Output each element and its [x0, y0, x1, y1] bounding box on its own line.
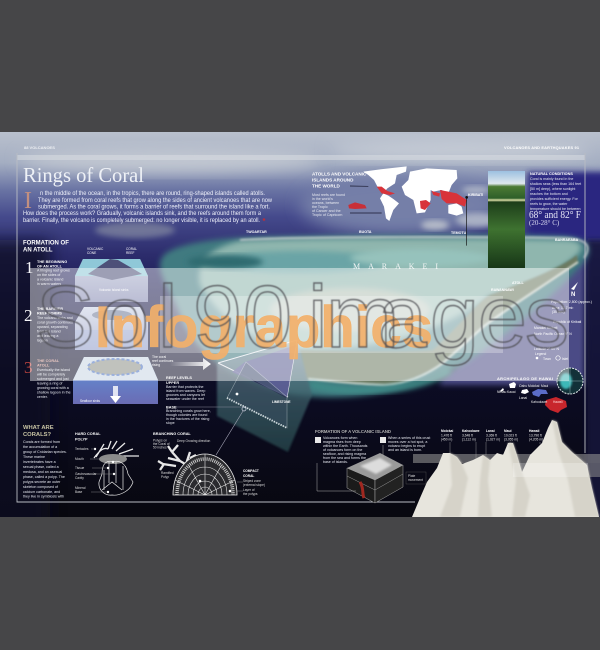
text: world map note	[312, 193, 345, 217]
step text 3: leaving a ring of	[37, 382, 62, 386]
step 1 block: volcano: REEF	[126, 251, 135, 255]
step 1 block: volcano	[75, 247, 148, 302]
panel: what are corals: phase, called a polyp. The	[23, 475, 65, 479]
text: reef levels: BASE	[166, 406, 177, 410]
text: volcanic step one: from the sea and forms the	[323, 456, 366, 460]
map of hawaiian islands: Niihau	[497, 390, 507, 394]
atoll place labels: BUOTA	[359, 230, 372, 234]
natural conditions: shallow seas (less than 164 feet	[530, 182, 581, 186]
intro text block: barrier. Finally, the volcano is completely submerged: no longer visible, it is replaced by an atoll.	[23, 218, 260, 224]
text: reef levels: seawater under the reef	[166, 397, 204, 401]
arrow: reef continues rising: The coral	[152, 355, 166, 359]
watermark: orange word: Infographics	[95, 295, 433, 360]
watermark band	[30, 268, 569, 381]
peak height labels: (1,112 m)	[462, 438, 476, 442]
map of hawaiian islands: Maui	[541, 384, 548, 388]
intro text block: n the middle of the ocean, in the tropics, there are round, ring-shaped islands called atolls.	[40, 191, 265, 197]
heading: atolls and volcanic islands: ISLANDS AROUND	[312, 178, 354, 182]
intro text block	[23, 188, 273, 224]
heading: formation of an atoll: AN ATOLL	[23, 248, 53, 254]
natural conditions: reaches the bottom and	[530, 192, 568, 196]
step text 1: a volcanic island	[37, 278, 63, 282]
diagram: hard coral polyp: Mineral	[75, 486, 86, 490]
map of hawaiian islands: Kahoolawe	[531, 400, 547, 404]
diagram: volcanic island block: Plate	[408, 474, 415, 478]
frame lines	[17, 153, 585, 502]
peak height labels	[441, 429, 543, 459]
arrow: reef continues rising: rising	[152, 363, 160, 367]
text: world map note: oceans, between	[312, 201, 339, 205]
text: world map note: the Tropic	[312, 205, 328, 209]
natural conditions: NATURAL CONDITIONS	[530, 172, 573, 176]
diagram: hard coral polyp: Base	[75, 490, 82, 494]
legend: scale and compass: North Pacific Ocean 9° N	[534, 332, 572, 336]
text: volcanic step one: seafloor, and rising magma	[323, 452, 366, 456]
peak height labels: 1,476 ft	[441, 434, 452, 438]
step text 1: 1	[25, 258, 34, 277]
peak height labels: Maui	[504, 429, 512, 433]
text: reef levels: REEF LEVELS	[166, 376, 192, 380]
natural conditions	[529, 172, 581, 227]
map of hawaiian islands: Oahu	[519, 384, 527, 388]
diagram: branching coral: Polyp	[161, 475, 169, 479]
photo of atoll vegetation	[488, 171, 525, 268]
diagram: hard coral polyp: HARD CORAL	[75, 432, 101, 436]
legend: scale and compass: Town	[543, 357, 551, 361]
step text 2: THE BARRIER	[37, 307, 63, 311]
background photograph: sky, ocean and atoll	[0, 132, 600, 540]
step text 3: growing coral with a	[37, 386, 69, 390]
diagram: branching coral: Striped zone	[243, 479, 261, 483]
watermark: outlined wordmark: Sol90images	[36, 267, 569, 366]
heading: atolls and volcanic islands: THE WORLD	[312, 184, 340, 188]
step text 3: THE CORAL	[37, 359, 60, 363]
panel: what are corals: Corals are formed from	[23, 440, 60, 444]
text: world map note: Most reefs are found	[312, 193, 345, 197]
text: volcanic step two	[380, 436, 430, 452]
map of hawaiian islands: Kauai	[507, 390, 516, 394]
atoll place labels: TWOARTAR	[246, 230, 267, 234]
arrow: reef continues rising	[152, 355, 211, 370]
atoll place labels: ATOLL	[512, 281, 524, 285]
step text 1: THE BEGINNING	[37, 260, 67, 264]
callout: reef cross-section block	[175, 340, 312, 455]
step text 2: lagoon	[37, 338, 48, 342]
step 3 block: atoll: Seafloor sinks	[80, 399, 100, 403]
diagram: branching coral: Ramified	[161, 471, 174, 475]
map of hawaiian islands	[497, 382, 567, 413]
archipelago heading: ARCHIPELAGO DE HAWAI	[497, 376, 553, 381]
diagram: branching coral: Layer of	[243, 488, 255, 492]
diagram: branching coral: Polyps on	[153, 438, 167, 442]
panel: what are corals: skeleton composed of	[23, 485, 58, 489]
panel: what are corals	[23, 425, 67, 498]
step text 1: OF AN ATOLL	[37, 264, 63, 268]
text: world map note: Tropic of Capricorn	[312, 213, 342, 217]
peak height labels: Molokai	[441, 429, 453, 433]
peak height labels: (4,205 m)	[529, 438, 543, 442]
diagram: branching coral: the polyps	[243, 492, 258, 496]
text: world map note: of Cancer and the	[312, 209, 341, 213]
step text 3	[24, 358, 71, 399]
natural conditions: 68° and 82° F	[529, 209, 581, 221]
panel: what are corals: they live in symbiosis with	[23, 494, 64, 498]
panel: what are corals: These marine	[23, 455, 45, 459]
text: volcanic step one: within the Earth. Thousands	[323, 444, 368, 448]
step text 3: will be completely	[37, 372, 65, 376]
legend: scale and compass: Area: 13.7 mi²	[552, 306, 574, 310]
natural conditions: [50 m] deep), where sunlight	[530, 187, 575, 191]
peak height labels: (3,055 m)	[504, 438, 518, 442]
peak height labels: Lanai	[486, 429, 495, 433]
diagram: hard coral polyp	[75, 432, 139, 495]
step text 1: in warm waters	[37, 282, 61, 286]
text: reef levels: Barrier that protects the	[166, 385, 204, 389]
legend: scale and compass: Republic of Kiribati	[553, 320, 582, 324]
atoll place labels: BANRAEABA	[555, 238, 579, 242]
step text 2: 2	[24, 306, 32, 325]
panel: what are corals: invertebrates have a	[23, 460, 56, 464]
legend: scale and compass	[534, 282, 592, 361]
atoll place labels: TEMOTU	[451, 231, 467, 235]
text: volcanic step two: moves over a hot spot, a	[388, 440, 427, 444]
atoll	[160, 235, 589, 397]
diagram: branching coral: (external slope)	[243, 483, 265, 487]
step text 2: coral growth continues	[37, 320, 73, 324]
label: kiribati: KIRIBATI	[468, 193, 483, 197]
text: volcanic step one: of volcanoes form on the	[323, 448, 362, 452]
map of hawaiian islands: Lanai	[519, 396, 527, 400]
step text 3: Eventually the island	[37, 368, 70, 372]
panel: what are corals: CORALS?	[23, 432, 51, 438]
diagram: branching coral	[153, 432, 265, 496]
panel: what are corals: sexual phase, called a	[23, 465, 59, 469]
page header left: 88 VOLCANOES	[24, 145, 55, 150]
map of hawaiian islands: Hawaii	[553, 400, 563, 404]
step text 3: shallow lagoon in the	[37, 390, 71, 394]
legend: scale and compass: Legend	[535, 352, 546, 356]
diagram: hard coral polyp: Tentacles	[75, 447, 89, 451]
text: volcanic step two: When a series of this crust	[388, 436, 430, 440]
diagram: branching coral: Deep Growing direction	[177, 439, 211, 443]
diagram: hard coral polyp: Cavity	[75, 476, 84, 480]
legend: scale and compass: Marakei Kiribati	[534, 326, 558, 330]
step 1 block: volcano: VOLCANIC	[87, 247, 104, 251]
peak height labels: Hawaii	[529, 429, 540, 433]
text: reef levels: UPPER	[166, 381, 179, 385]
step text 2: upward, separating	[37, 325, 68, 329]
label: marakei: MARAKEI	[353, 262, 438, 271]
text: reef levels: though colonies are found	[166, 413, 207, 417]
text: volcanic step one: magma rises from deep	[323, 440, 361, 444]
text: world map note: in the world's	[312, 197, 333, 201]
text: reef levels: slope	[166, 421, 175, 425]
drop cap: I	[24, 188, 32, 214]
step text 2: and leaving a	[37, 334, 58, 338]
diagram: hard coral polyp: Gastrovascular	[75, 472, 97, 476]
peak height labels: (1,027 m)	[486, 438, 500, 442]
step text 3: center.	[37, 395, 48, 399]
step text 2: The volcano sinks and	[37, 316, 73, 320]
peak height labels: 3,648 ft	[462, 434, 473, 438]
legend: scale and compass: (35 km²)	[552, 310, 565, 314]
map of hawaiian islands: Molokai	[528, 384, 540, 388]
text: volcanic step two: volcano begins to erupt	[388, 444, 425, 448]
natural conditions: Coral is mainly found in the	[530, 177, 573, 181]
intro text block: They are formed from coral reefs that grow along the sides of ancient volcanoes that are now	[38, 198, 273, 204]
page header right: VOLCANOES AND EARTHQUAKES 91	[504, 145, 580, 150]
peak height labels: 10,023 ft	[504, 434, 517, 438]
peak height labels: (450 m)	[441, 438, 452, 442]
diagram: branching coral: CORAL	[243, 474, 254, 478]
step 1 block: volcano: CORAL	[126, 247, 137, 251]
diagram: branching coral: COMPACT	[243, 469, 259, 473]
step text 1	[25, 258, 70, 286]
natural conditions: provides sufficient energy. For	[530, 197, 579, 201]
diagram: branching coral: BRANCHING CORAL	[153, 432, 191, 436]
text: reef levels: grooves and canyons let	[166, 393, 205, 397]
diagram: volcanic island block: movement	[408, 478, 423, 482]
panel: what are corals: calcium carbonate, and	[23, 490, 60, 494]
peak height labels: 3,369 ft	[486, 434, 497, 438]
heading: formation of an atoll: FORMATION OF	[23, 240, 69, 246]
text: reef levels	[166, 376, 211, 425]
step text 2: from the island	[37, 330, 61, 334]
legend: scale and compass: Latitude 2° 00' N	[534, 347, 560, 351]
step 1 block: volcano: CONE	[87, 251, 96, 255]
legend: scale and compass: Islet	[562, 357, 568, 361]
grey band behind mountains	[413, 454, 600, 477]
text: volcanic step one: base of islands.	[323, 460, 348, 464]
callout: reef cross-section block: LIMESTONE	[272, 400, 291, 404]
intro text block: How does the process work? Gradually, volcanic islands sink, and the reefs around them form a	[23, 211, 262, 217]
atoll place labels: RAWANNAWI	[491, 288, 514, 292]
text: volcanic step one	[315, 436, 368, 464]
arrow: reef continues rising: reef continues	[152, 359, 174, 363]
natural conditions: temperature should be between	[530, 207, 581, 211]
heading: formation of an atoll	[23, 240, 69, 254]
legend: scale and compass: Population: 2,800 (approx.)	[551, 300, 592, 304]
text: volcanic step one: Volcanoes form when	[323, 436, 357, 440]
step text 2	[24, 306, 73, 342]
diagram: volcanic island block	[317, 445, 426, 503]
natural conditions: (20-28° C)	[529, 219, 560, 227]
step text 3: submerged and just	[37, 377, 69, 381]
text: reef levels: island from waves. Deep	[166, 389, 205, 393]
step text 1: on the sides of	[37, 273, 60, 277]
panel: what are corals: medusa, and an asexual	[23, 470, 62, 474]
step text 2: REEF FORMS	[37, 312, 62, 316]
step text 3: ATOLL	[37, 364, 50, 368]
panel: what are corals: the accumulation of a	[23, 445, 57, 449]
atoll place labels	[246, 230, 579, 292]
diagram: hard coral polyp: Mouth	[75, 457, 84, 461]
heading: atolls and volcanic islands	[312, 172, 367, 188]
text: reef levels: Branching corals grow here,	[166, 409, 211, 413]
diagram: branching coral: 50 inches	[153, 446, 167, 450]
world map	[348, 166, 468, 246]
diagram: hard coral polyp: Tissue	[75, 466, 84, 470]
diagram: hard coral polyp: POLYP	[75, 438, 88, 442]
step text 3: 3	[24, 358, 32, 377]
diagram: branching coral: the Coral of	[153, 442, 170, 446]
peak height labels: Kahoolawe	[462, 429, 480, 433]
panel: what are corals: WHAT ARE	[23, 425, 54, 431]
panel: what are corals: group of Cnidarian species.	[23, 450, 67, 454]
text: reef levels: in the fractures of the rising	[166, 417, 209, 421]
text: volcanic step two: and an island is born.	[388, 448, 422, 452]
step 3 block: atoll	[73, 357, 158, 404]
peak height labels: 13,796 ft	[529, 434, 542, 438]
title: Rings of Coral	[23, 163, 144, 187]
step 1 block: volcano: Volcanic Island sinks	[99, 288, 129, 292]
legend: scale and compass: N	[571, 292, 575, 298]
panel: what are corals: polyps secrete an outer	[23, 480, 61, 484]
step text 1: A fringing reef grows	[37, 268, 70, 272]
illustration: hawaiian volcano peaks	[412, 420, 599, 517]
natural conditions: reefs to grow, the water	[530, 202, 568, 206]
heading: atolls and volcanic islands: ATOLLS AND VOLCANIC	[312, 172, 367, 176]
step 2 block: sinking island	[75, 307, 148, 350]
locator globe	[557, 368, 583, 394]
intro text block: submerged. As the coral grows, it forms a barrier of reefs that surround the island like a fort.	[38, 204, 270, 210]
heading: formation of a volcanic island: FORMATION OF A VOLCANIC ISLAND	[315, 429, 391, 434]
